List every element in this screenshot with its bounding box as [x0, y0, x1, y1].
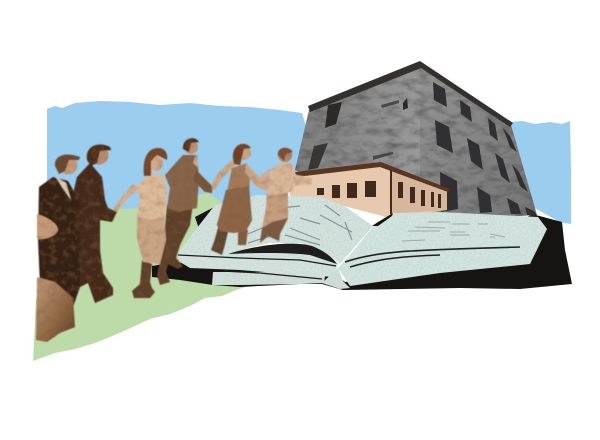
person: front man — [38, 155, 82, 307]
book: lower left page stack — [212, 272, 325, 285]
large grey building — [295, 61, 537, 217]
tan building: roof line — [295, 162, 450, 192]
building: left facade windows — [308, 98, 408, 170]
person: back woman — [254, 148, 312, 243]
meadow: green torn paper — [33, 192, 252, 361]
book: right page curl lines — [345, 247, 520, 267]
small tan building — [290, 162, 450, 218]
person: smiling woman — [109, 148, 167, 298]
person: second woman — [208, 144, 270, 255]
person: tall man — [62, 145, 117, 303]
book: left fanned pages — [177, 195, 373, 264]
book: left stack dark edges — [178, 255, 336, 279]
tan building: side shadow — [390, 170, 447, 214]
sky: left torn paper — [47, 101, 320, 215]
black book cover — [152, 205, 572, 290]
foreground: tan table top — [37, 214, 58, 239]
sky: right torn paper — [505, 118, 571, 224]
tan building: walls — [290, 164, 447, 218]
open book — [177, 195, 547, 289]
book: dark shadow under the curled page — [228, 244, 337, 264]
tan building: windows — [317, 170, 441, 214]
dancers — [36, 138, 312, 342]
building: right facade — [420, 64, 537, 217]
book: spine shadow — [372, 213, 393, 226]
building: right facade windows — [433, 82, 537, 215]
person: man in suit — [157, 138, 212, 285]
book: left page print — [248, 205, 352, 245]
building: left facade — [295, 64, 424, 214]
building: roof edge — [308, 61, 513, 127]
book: right page — [338, 212, 547, 286]
book: upper left page stack — [177, 244, 338, 277]
foreground: tan shape at bottom left — [36, 277, 75, 342]
book: bottom corner fold — [322, 268, 350, 289]
book: right page print — [402, 222, 505, 241]
